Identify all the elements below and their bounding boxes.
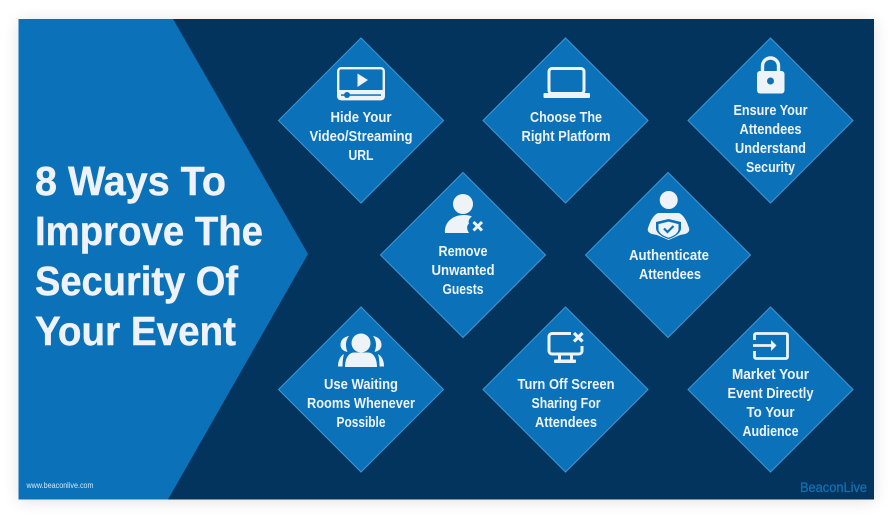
- label: URL: [348, 148, 374, 164]
- panel: turn off screen sharing for attendees: [483, 307, 648, 472]
- panel: remove unwanted guests: [380, 172, 546, 338]
- label: Market Your: [732, 367, 809, 383]
- label: Attendees: [639, 267, 701, 283]
- label: Event Directly: [728, 386, 814, 402]
- label: Remove: [438, 244, 488, 260]
- label: [310, 110, 412, 164]
- title: [35, 158, 263, 354]
- label: [307, 377, 415, 431]
- blue arrow panel: [18, 19, 308, 500]
- label: Audience: [742, 424, 798, 440]
- label: Sharing For: [532, 396, 601, 412]
- panel: ensure your attendees understand security: [688, 38, 853, 203]
- label: Authenticate: [629, 248, 709, 264]
- icon: user with shield: [648, 191, 689, 240]
- label: To Your: [746, 405, 795, 421]
- label: Use Waiting: [324, 377, 398, 393]
- logo: BeaconLive: BeaconLive: [800, 480, 867, 495]
- label: Ensure Your: [734, 103, 808, 119]
- icon: video player: [338, 68, 384, 100]
- label: Video/Streaming: [310, 129, 412, 145]
- icon: laptop: [544, 68, 590, 98]
- label: [629, 248, 709, 283]
- title: Improve The: [35, 208, 263, 254]
- label: [522, 110, 610, 145]
- panel: hide your video/streaming URL: [278, 38, 444, 203]
- label: [518, 377, 614, 431]
- label: Hide Your: [330, 110, 392, 126]
- label: [432, 244, 494, 298]
- website url: www.beaconlive.com: [26, 481, 94, 490]
- icon: user remove: [445, 194, 482, 233]
- label: Right Platform: [522, 129, 610, 145]
- label: Guests: [442, 282, 484, 298]
- label: Security: [746, 160, 795, 176]
- label: Choose The: [530, 110, 602, 126]
- icon: group of people: [338, 334, 384, 367]
- panel: choose the right platform: [483, 38, 648, 203]
- label: Rooms Whenever: [307, 396, 415, 412]
- panel: market your event directly to your audience: [688, 307, 853, 472]
- label: Possible: [336, 415, 386, 431]
- icon: input arrow: [753, 334, 788, 358]
- label: Attendees: [740, 122, 802, 138]
- label: Turn Off Screen: [518, 377, 614, 393]
- label: [734, 103, 808, 176]
- label: Understand: [735, 141, 806, 157]
- label: Attendees: [535, 415, 597, 431]
- icon: padlock: [757, 58, 784, 94]
- icon: monitor off: [549, 333, 582, 363]
- title: Your Event: [35, 308, 236, 354]
- title: 8 Ways To: [35, 158, 226, 204]
- panel: use waiting rooms whenever possible: [278, 307, 444, 472]
- panel: authenticate attendees: [586, 172, 750, 338]
- label: [728, 367, 814, 440]
- title: Security Of: [35, 258, 238, 304]
- label: Unwanted: [432, 263, 494, 279]
